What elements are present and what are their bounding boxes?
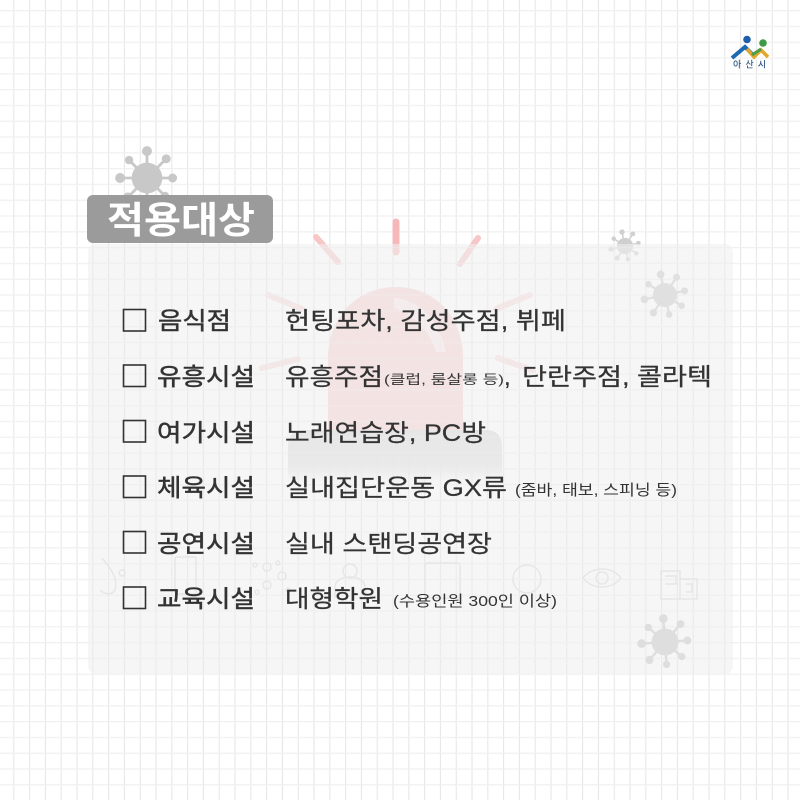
icon: virus bottom right of panel [630, 607, 699, 676]
icon: person [335, 564, 365, 598]
row: 체육시설: 실내집단운동 GX류 [285, 475, 507, 502]
faint icon row [100, 557, 697, 599]
row: 교육시설 [124, 586, 557, 613]
icon: city logo: 아 산 시 [733, 60, 766, 70]
row: 공연시설: 공연시설 [157, 531, 255, 558]
row: 여가시설: 여가시설 [157, 420, 255, 447]
siren dome highlight [394, 298, 446, 352]
icon: eye [583, 569, 621, 587]
row: 유흥시설: (클럽, 룸살롱 등) [384, 372, 504, 387]
row: 유흥시설: 유흥주점 [285, 364, 383, 391]
icon: sick face [513, 565, 541, 593]
row: 공연시설 [124, 531, 492, 558]
row: 교육시설: 교육시설 [157, 586, 255, 613]
row: 교육시설: (수용인원 300인 이상) [393, 593, 557, 610]
title badge [87, 195, 273, 243]
icon: buildings [661, 571, 697, 599]
row: 여가시설 [124, 420, 486, 447]
row: 여가시설: 노래연습장, PC방 [285, 420, 486, 447]
row: 유흥시설: 단란주점, 콜라텍 [522, 364, 712, 391]
row: 체육시설: (줌바, 태보, 스피닝 등) [515, 482, 677, 499]
row: 공연시설: 실내 스탠딩공연장 [285, 531, 492, 558]
icon: molecules [253, 561, 290, 594]
icon: nose [100, 558, 125, 594]
panel: translucent content panel [88, 244, 733, 674]
siren dome [328, 287, 463, 436]
row: 음식점: 음식점 [158, 308, 231, 335]
icon: calendar [425, 563, 460, 598]
siren base [288, 430, 502, 484]
row: 유흥시설 [124, 364, 712, 391]
icon: small virus top right [606, 227, 643, 264]
row: 유흥시설: 유흥시설 [157, 364, 255, 391]
icon: city logo [732, 36, 768, 70]
grid showing through panel [88, 244, 733, 674]
row: 음식점: 헌팅포차, 감성주점, 뷔페 [285, 308, 566, 335]
icon: virus right of panel [637, 267, 692, 322]
title badge: 적용대상 [107, 200, 255, 241]
icon: phone [175, 557, 196, 594]
row: 음식점 [124, 308, 566, 335]
row: 교육시설: 대형학원 [285, 586, 383, 613]
icon: virus above title [105, 136, 188, 218]
row: 체육시설 [124, 475, 677, 502]
row: 유흥시설: , [504, 364, 511, 391]
illustration: red siren [262, 222, 532, 484]
siren rays [262, 222, 532, 370]
row: 체육시설: 체육시설 [157, 475, 255, 502]
